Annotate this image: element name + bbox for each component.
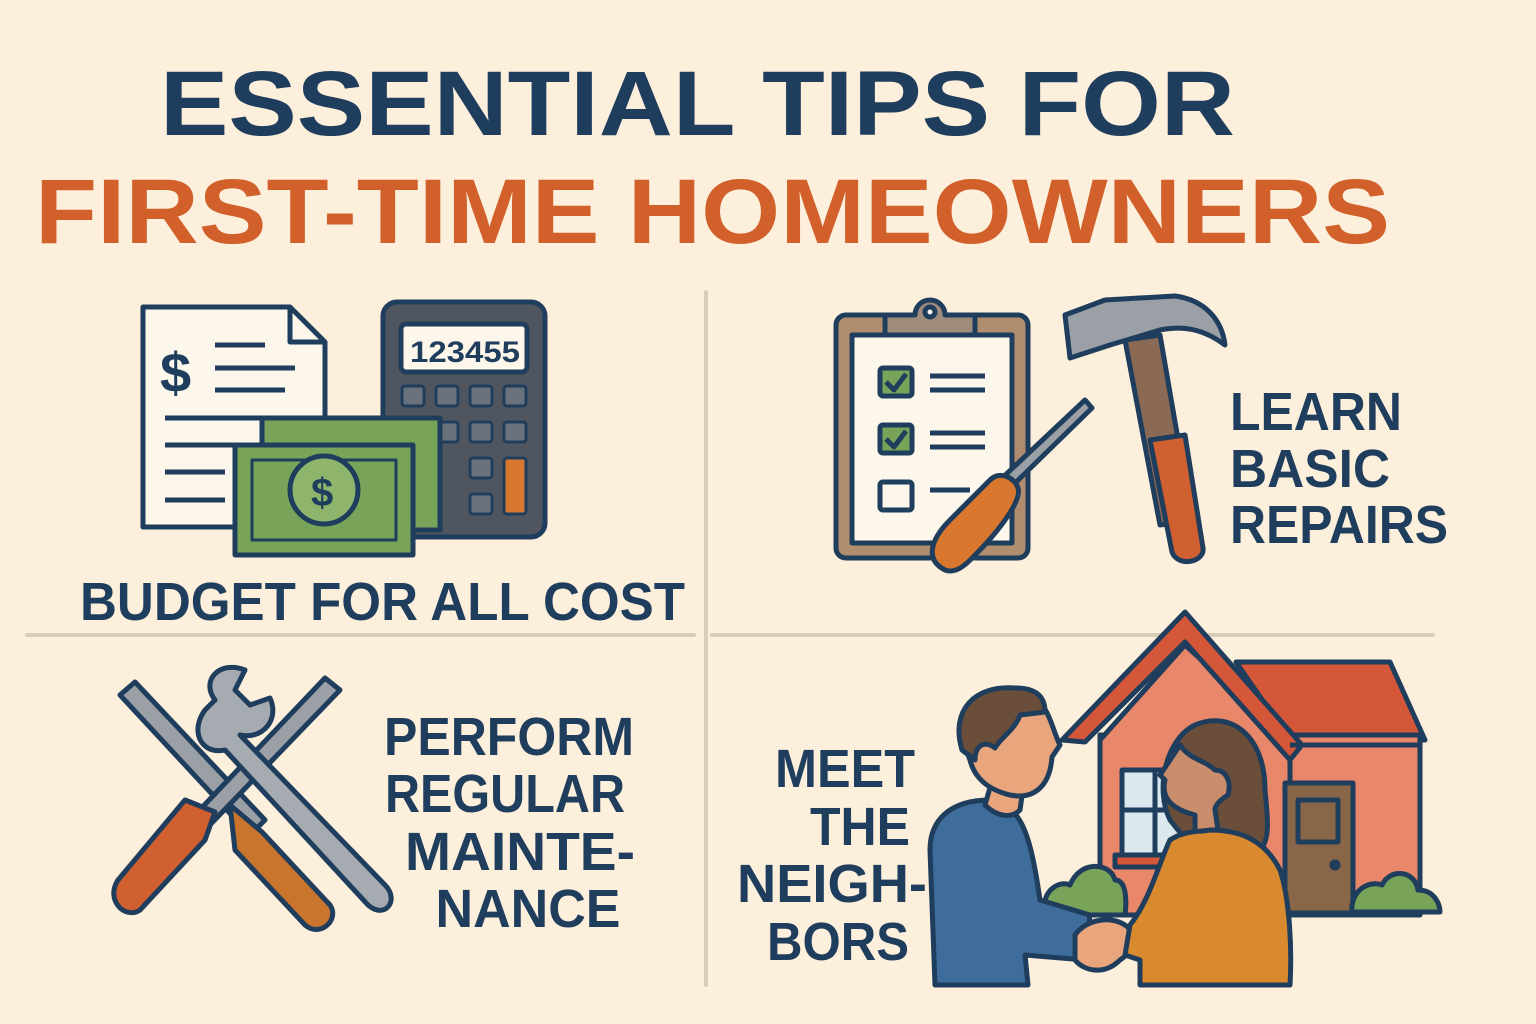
text: perform regular maintenance — [384, 707, 635, 939]
icon: woman — [1125, 721, 1291, 985]
panel: repairs — [836, 296, 1448, 571]
title: ESSENTIAL TIPS FOR — [160, 53, 1235, 155]
text: learn basic repairs: LEARN — [1230, 382, 1402, 442]
text: perform regular maintenance: MAINTE- — [405, 822, 635, 882]
text: learn basic repairs: BASIC — [1230, 439, 1390, 499]
text: budget: BUDGET FOR ALL COST — [80, 572, 685, 632]
title — [35, 53, 1390, 263]
text: meet the neighbors: MEET — [775, 739, 915, 799]
icon: man — [930, 688, 1134, 985]
text: meet the neighbors: BORS — [767, 912, 909, 972]
text: meet the neighbors: NEIGH- — [737, 854, 927, 914]
panel: neighbors — [737, 612, 1440, 985]
icon: money — [235, 418, 440, 555]
panel: budget — [80, 302, 685, 632]
text: perform regular maintenance: REGULAR — [385, 764, 625, 824]
text: meet the neighbors — [737, 739, 927, 972]
title: FIRST-TIME HOMEOWNERS — [35, 161, 1390, 263]
panel: maintenance — [114, 667, 635, 939]
icon: calculator — [383, 302, 545, 537]
text: learn basic repairs — [1230, 382, 1448, 555]
icon: tools — [114, 667, 391, 929]
text: perform regular maintenance: PERFORM — [384, 707, 634, 767]
icon: screwdriver — [932, 400, 1092, 571]
icon: money: $ — [311, 471, 333, 515]
icon: hammer — [1065, 296, 1225, 562]
icon: clipboard — [836, 300, 1028, 558]
text: perform regular maintenance: NANCE — [436, 879, 620, 939]
icon: house — [1044, 612, 1440, 915]
icon: document: $ — [160, 341, 191, 404]
icon: document — [143, 307, 325, 527]
icon: calculator: 123455 — [410, 336, 520, 369]
text: meet the neighbors: THE — [810, 797, 910, 857]
text: learn basic repairs: REPAIRS — [1230, 495, 1448, 555]
